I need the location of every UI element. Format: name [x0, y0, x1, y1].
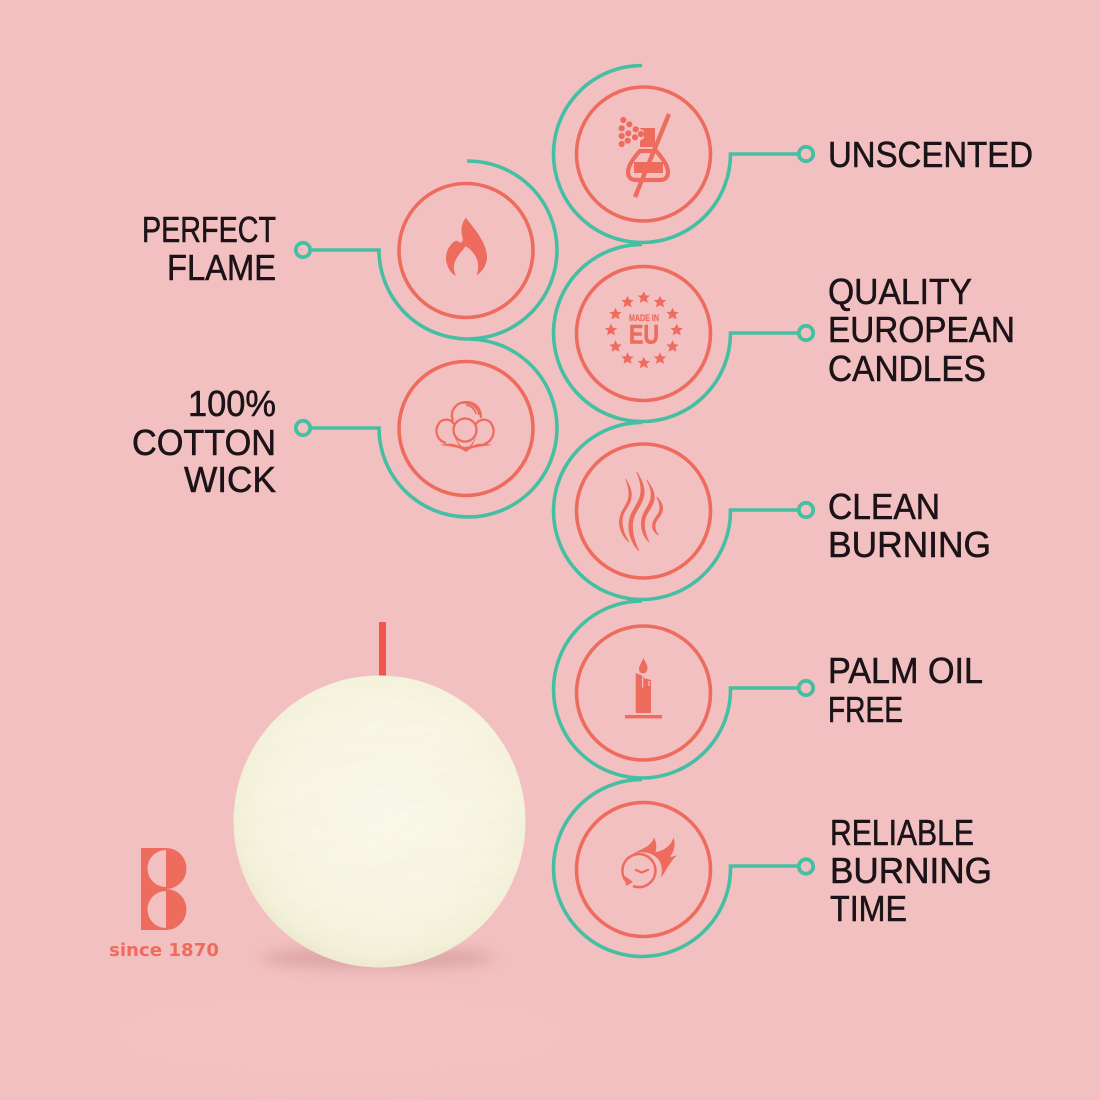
- icon: candle: [625, 658, 662, 718]
- label: EUROPEAN: [828, 309, 1015, 350]
- connector arc: [554, 601, 800, 778]
- feature: perfect flame: [142, 161, 557, 339]
- label: UNSCENTED: [828, 134, 1033, 175]
- icon ring: [399, 184, 533, 318]
- connector node: [799, 859, 813, 874]
- connector node: [799, 681, 813, 695]
- label: [830, 812, 992, 929]
- label: RELIABLE: [830, 812, 974, 853]
- connector node: [296, 243, 310, 257]
- feature: palm oil free: [554, 601, 983, 778]
- faint floor reflection: [100, 1005, 580, 1065]
- wick: [379, 622, 386, 684]
- label: [132, 383, 276, 500]
- label: [828, 271, 1015, 389]
- feature: 100% cotton wick: [132, 339, 557, 517]
- floor shadow: [260, 947, 496, 969]
- icon ring: [399, 362, 533, 496]
- label: COTTON: [132, 422, 276, 463]
- label: QUALITY: [828, 271, 972, 312]
- icon ring: [576, 266, 710, 400]
- label: [828, 650, 983, 730]
- label: 100%: [188, 383, 276, 424]
- icon ring: [576, 626, 710, 760]
- logo mark: [141, 848, 186, 930]
- feature: quality european candles: [554, 244, 1015, 421]
- icon: cotton boll: [436, 402, 494, 452]
- label: PALM OIL: [828, 650, 983, 691]
- label: PERFECT: [142, 209, 276, 250]
- icon: made in EU stars: EU: [629, 319, 659, 349]
- feature: unscented: [554, 66, 1033, 242]
- connector arc: [554, 244, 800, 421]
- label: WICK: [184, 459, 276, 500]
- icon: clock with flame: [622, 838, 677, 887]
- candle photo: [100, 622, 580, 1065]
- connector arc: [554, 422, 800, 599]
- connector node: [799, 147, 813, 161]
- label: FLAME: [167, 247, 276, 288]
- wax ball: [234, 676, 526, 968]
- label: CANDLES: [828, 348, 986, 389]
- label: BURNING: [828, 524, 991, 565]
- logo tagline: since 1870: [109, 941, 219, 961]
- icon: made in EU stars: [605, 291, 683, 368]
- connector node: [799, 326, 813, 340]
- label: FREE: [828, 689, 903, 730]
- icon: flame: [446, 218, 487, 276]
- icon: smoke waves: [619, 472, 663, 551]
- label: CLEAN: [828, 486, 940, 527]
- label: [828, 486, 991, 565]
- wax texture: [234, 676, 526, 968]
- icon: crossed out perfume bottle: [619, 114, 669, 197]
- icon ring: [576, 802, 710, 936]
- connector arc: [309, 161, 557, 339]
- feature: reliable burning time: [554, 780, 992, 956]
- icon ring: [576, 444, 710, 578]
- connector arc: [554, 66, 800, 242]
- connector node: [296, 421, 310, 435]
- label: TIME: [830, 888, 907, 929]
- label: [142, 209, 276, 288]
- icon: made in EU stars: MADE IN: [629, 313, 659, 323]
- connector arc: [554, 780, 800, 956]
- label: BURNING: [830, 850, 992, 891]
- icon ring: [576, 87, 710, 221]
- connector node: [799, 503, 813, 517]
- feature: clean burning: [554, 422, 991, 599]
- connector arc: [309, 339, 557, 517]
- logo: [109, 848, 219, 961]
